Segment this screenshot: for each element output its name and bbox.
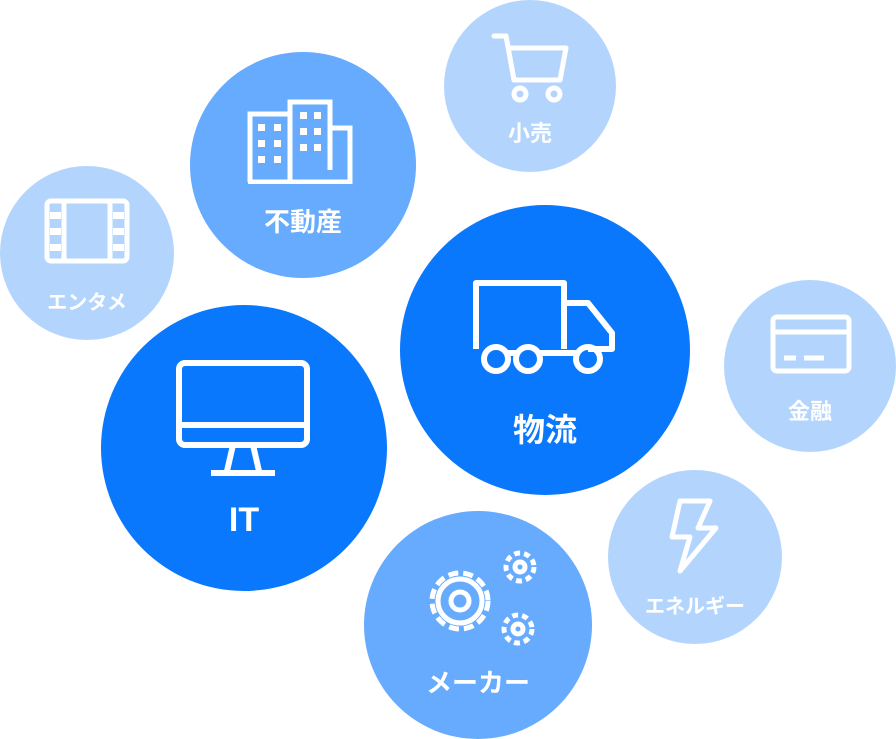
- label: 不動産: [264, 207, 342, 237]
- icon: truck: [473, 280, 615, 374]
- bubble: IT: [101, 305, 387, 591]
- bubble: 金融: [724, 280, 896, 452]
- icon: cart: [492, 34, 568, 102]
- icon: card: [770, 314, 852, 374]
- bubble: エンタメ: [0, 166, 174, 340]
- label: エンタメ: [47, 292, 127, 314]
- label: 金融: [788, 399, 832, 424]
- bubble: 不動産: [190, 52, 416, 278]
- label: 物流: [513, 412, 577, 448]
- bubble: 物流: [400, 205, 690, 495]
- label: 小売: [508, 121, 552, 146]
- icon: gears: [430, 550, 536, 646]
- bubble: エネルギー: [608, 470, 782, 644]
- label: エネルギー: [645, 596, 745, 618]
- icon: buildings: [248, 100, 352, 184]
- bubble: メーカー: [364, 511, 592, 739]
- bubble: 小売: [444, 0, 616, 172]
- icon: film: [44, 198, 130, 264]
- label: メーカー: [426, 668, 530, 698]
- label: IT: [229, 501, 259, 539]
- icon: lightning: [670, 498, 718, 574]
- icon: monitor: [176, 360, 310, 476]
